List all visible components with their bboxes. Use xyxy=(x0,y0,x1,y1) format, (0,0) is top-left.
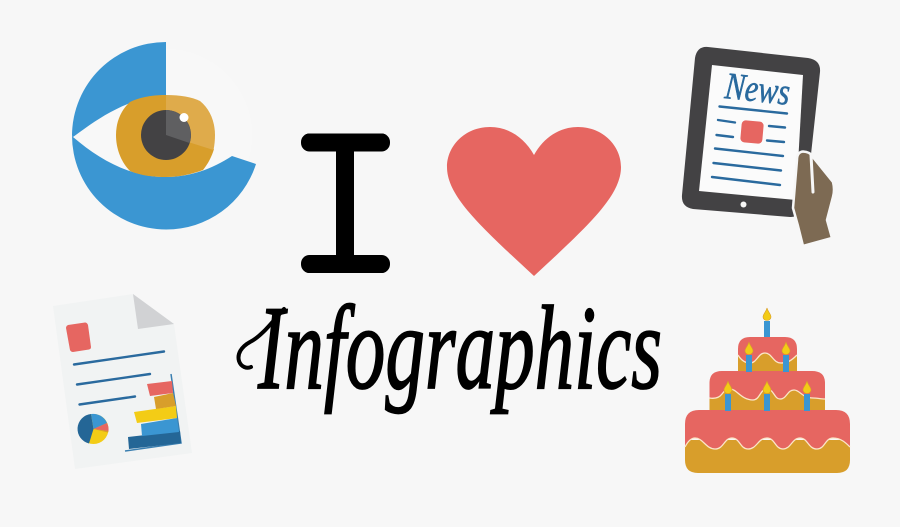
icon: birthday cake xyxy=(685,308,850,473)
news title: News xyxy=(722,65,792,114)
icon: eye xyxy=(72,42,256,230)
letter I: I xyxy=(281,97,409,337)
top tier xyxy=(738,337,797,372)
bottom tier xyxy=(685,410,850,473)
tablet screen xyxy=(699,65,803,200)
infographic canvas xyxy=(66,42,850,473)
red picture xyxy=(66,322,91,352)
middle tier xyxy=(710,371,825,411)
folded corner xyxy=(133,294,174,329)
home button xyxy=(740,202,746,208)
title: Infographics: Infographics xyxy=(257,281,662,414)
title: Infographics xyxy=(238,281,662,414)
stacked bar chart xyxy=(125,374,181,451)
pie chart xyxy=(78,414,109,444)
icon: document with charts xyxy=(53,294,192,469)
paper xyxy=(53,294,192,469)
hand xyxy=(793,152,834,246)
red picture xyxy=(740,120,764,144)
icon: tablet with news xyxy=(682,47,834,246)
icon: heart xyxy=(447,127,621,276)
candles xyxy=(725,321,810,411)
swash of the initial xyxy=(238,309,284,368)
article lines xyxy=(712,106,787,185)
text lines xyxy=(74,352,164,404)
tablet body xyxy=(682,47,820,217)
candle flames xyxy=(724,308,811,394)
